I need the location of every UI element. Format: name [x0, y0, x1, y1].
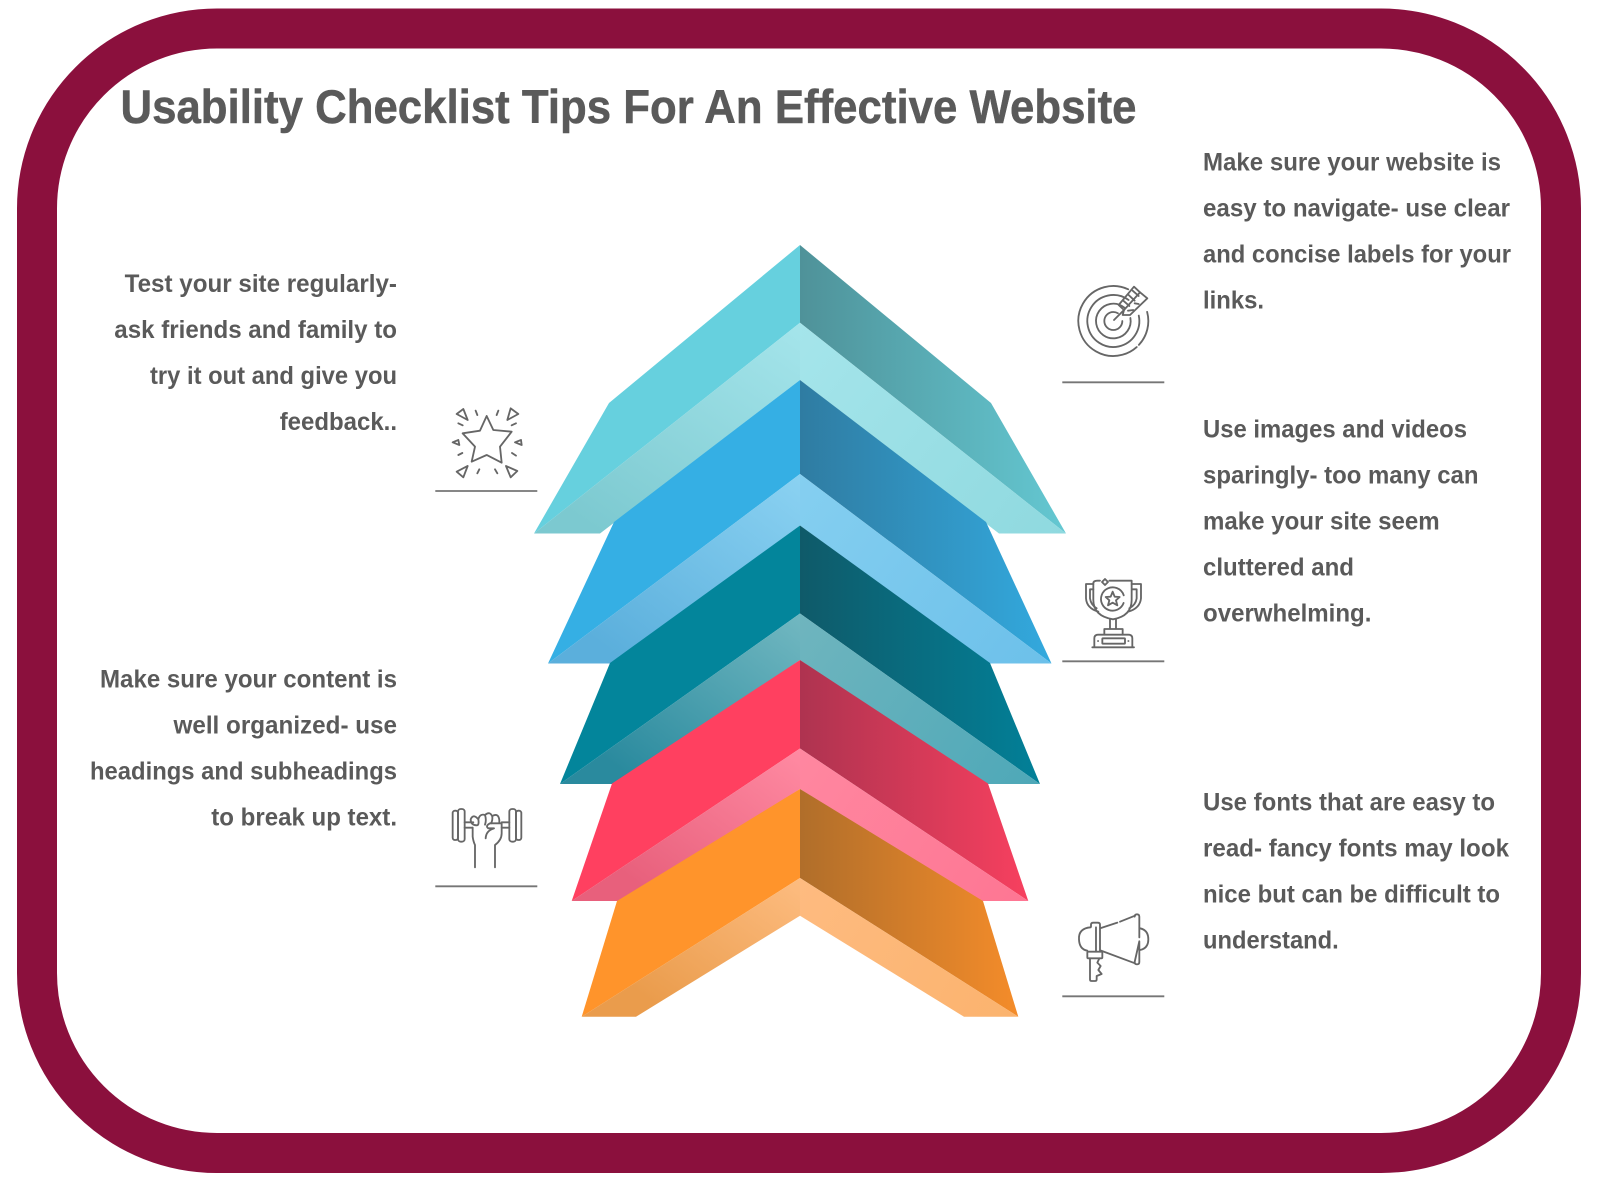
- divider under megaphone icon: [1062, 995, 1164, 997]
- text block: readable fonts: nice but can be difficult to: [1203, 880, 1500, 908]
- text block: organize content: Make sure your content is: [100, 666, 397, 694]
- text block: readable fonts: [1203, 788, 1509, 954]
- text block: readable fonts: read- fancy fonts may look: [1203, 834, 1509, 862]
- text block: easy to navigate: links.: [1203, 286, 1264, 314]
- text block: test your site: feedback..: [280, 408, 397, 436]
- text block: readable fonts: understand.: [1203, 926, 1339, 954]
- text block: easy to navigate: [1203, 148, 1511, 314]
- icon: star with sparkles: [453, 408, 522, 477]
- text block: easy to navigate: and concise labels for your: [1203, 240, 1511, 268]
- text block: images and videos: make your site seem: [1203, 508, 1440, 536]
- text block: images and videos: Use images and videos: [1203, 416, 1467, 444]
- text block: test your site: ask friends and family to: [114, 316, 397, 344]
- chevron 5: orange: [582, 789, 1018, 1017]
- chevron 3: dark teal: [560, 526, 1040, 784]
- text block: images and videos: overwhelming.: [1203, 600, 1371, 628]
- divider under trophy icon: [1062, 660, 1164, 662]
- text block: organize content: [90, 666, 397, 832]
- text block: readable fonts: Use fonts that are easy to: [1203, 788, 1495, 816]
- title: Usability Checklist Tips For An Effective Website: [120, 80, 1136, 133]
- icon: target with arrow: [1070, 278, 1156, 364]
- text block: images and videos: [1203, 416, 1478, 628]
- divider under dumbbell icon: [435, 885, 537, 887]
- text block: test your site: Test your site regularly-: [125, 270, 397, 298]
- divider under target icon: [1062, 381, 1164, 383]
- icon: hand lifting dumbbell: [453, 809, 521, 867]
- text block: images and videos: cluttered and: [1203, 554, 1354, 582]
- text block: organize content: to break up text.: [211, 804, 397, 832]
- text block: easy to navigate: Make sure your website is: [1203, 148, 1501, 176]
- chevron stack: [534, 245, 1066, 1017]
- text block: organize content: headings and subheadings: [90, 758, 397, 786]
- text block: test your site: [114, 270, 397, 436]
- chevron 2: blue: [548, 380, 1052, 664]
- chevron 1: light teal: [534, 245, 1066, 534]
- text block: organize content: well organized- use: [173, 712, 397, 740]
- text block: easy to navigate: easy to navigate- use clear: [1203, 194, 1510, 222]
- icon: megaphone: [1079, 914, 1148, 981]
- text block: test your site: try it out and give you: [150, 362, 397, 390]
- text block: images and videos: sparingly- too many can: [1203, 462, 1478, 490]
- icon: trophy: [1086, 579, 1141, 647]
- divider under star icon: [435, 490, 537, 492]
- chevron 4: pink: [572, 660, 1028, 901]
